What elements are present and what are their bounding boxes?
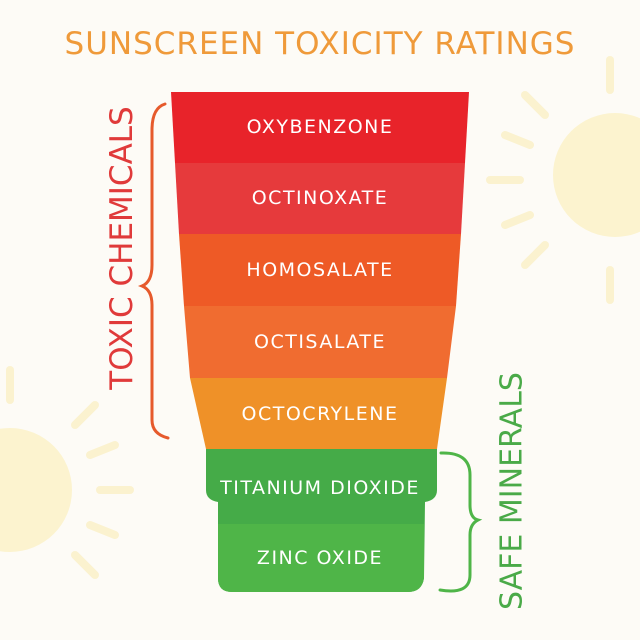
text: OCTOCRYLENE: [242, 403, 398, 425]
text: TITANIUM DIOXIDE: [220, 477, 420, 499]
labels: OXYBENZONE: [247, 116, 393, 138]
side label: toxic chemicals: TOXIC CHEMICALS: [104, 106, 140, 390]
side label: safe minerals: SAFE MINERALS: [494, 372, 530, 610]
text: HOMOSALATE: [246, 259, 394, 281]
title: SUNSCREEN TOXICITY RATINGS: [65, 26, 575, 62]
text: OCTISALATE: [254, 331, 386, 353]
text: ZINC OXIDE: [257, 547, 383, 569]
text: OCTINOXATE: [252, 187, 388, 209]
